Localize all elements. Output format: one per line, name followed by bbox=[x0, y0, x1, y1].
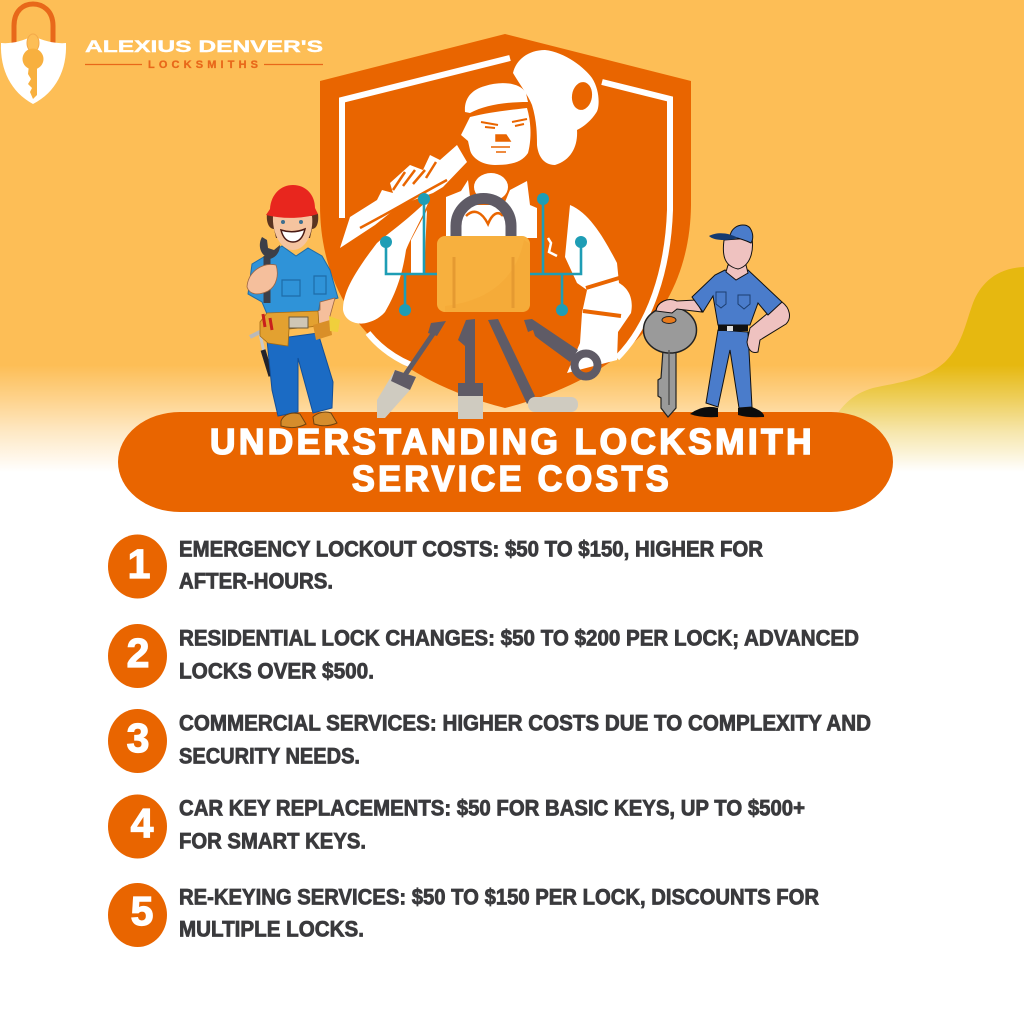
worker right: shoes bbox=[690, 407, 764, 417]
shield white outline bbox=[342, 58, 670, 365]
logo tagline: LOCKSMITHS bbox=[148, 59, 258, 71]
padlock bbox=[437, 198, 530, 312]
worker right: head and cap bbox=[709, 225, 753, 280]
figure: upper left arm bbox=[343, 198, 430, 324]
figure: right arm bbox=[565, 205, 632, 373]
figure: shoulder key shaft and hand bbox=[340, 145, 467, 248]
worker right: trousers bbox=[706, 330, 752, 408]
worker right: belt bbox=[718, 325, 748, 331]
logo icon: padlock shield bbox=[1, 4, 66, 104]
item 1 text: EMERGENCY LOCKOUT COSTS: $50 TO $150, HIGHER FOR bbox=[179, 536, 763, 562]
worker left: hammer bbox=[250, 331, 271, 376]
list item 5 bbox=[108, 883, 819, 947]
badge 1: 1 bbox=[128, 541, 150, 587]
tool: flat driver bbox=[458, 319, 483, 419]
worker left: head bbox=[266, 185, 318, 250]
item 3 text: SECURITY NEEDS. bbox=[179, 744, 360, 768]
shield base bbox=[320, 34, 691, 408]
giant key head bbox=[513, 50, 599, 165]
circuit right bbox=[530, 193, 587, 316]
list item 2 bbox=[108, 624, 859, 688]
badge 5 bbox=[108, 883, 167, 947]
worker with key bbox=[644, 225, 789, 417]
worker left: hard hat bbox=[266, 185, 318, 218]
item 4 text: CAR KEY REPLACEMENTS: $50 FOR BASIC KEYS, UP TO $500+ bbox=[179, 796, 805, 820]
worker left: shirt bbox=[248, 246, 338, 314]
worker left: other arm bbox=[313, 298, 335, 328]
worker with wrench bbox=[247, 185, 340, 428]
logo bbox=[1, 4, 323, 104]
worker left: boots bbox=[281, 412, 337, 428]
badge 1 bbox=[108, 534, 167, 598]
worker right: arm on key bbox=[656, 300, 702, 313]
badge 3: 3 bbox=[127, 715, 149, 761]
badge 3 bbox=[108, 709, 167, 773]
item 1 text: AFTER-HOURS. bbox=[179, 568, 333, 594]
item 2 text: LOCKS OVER $500. bbox=[179, 658, 374, 684]
item 5 text: RE-KEYING SERVICES: $50 TO $150 PER LOCK, DISCOUNTS FOR bbox=[179, 884, 819, 910]
list item 3 bbox=[108, 709, 871, 773]
item 4 text bbox=[179, 796, 805, 854]
item 5 text bbox=[179, 884, 819, 942]
badge 5: 5 bbox=[131, 888, 153, 934]
badge 2: 2 bbox=[127, 630, 149, 676]
padlock body bbox=[437, 236, 530, 312]
worker right: hip arm bbox=[747, 302, 789, 353]
background: amber header bbox=[0, 0, 1024, 480]
item 5 text: MULTIPLE LOCKS. bbox=[179, 916, 364, 942]
item 1 text bbox=[179, 536, 763, 594]
background: yellow wave bbox=[830, 267, 1024, 480]
shield illustration bbox=[320, 34, 691, 419]
item 2 text bbox=[179, 626, 859, 684]
figure: cap bbox=[465, 83, 528, 113]
tool: wrench key bbox=[524, 319, 598, 376]
badge 2 bbox=[108, 624, 167, 688]
worker right: giant key bbox=[644, 307, 696, 417]
logo wordmark: ALEXIUS DENVER'S bbox=[85, 37, 323, 56]
tool: pick bbox=[488, 319, 578, 412]
item 3 text: COMMERCIAL SERVICES: HIGHER COSTS DUE TO COMPLEXITY AND bbox=[179, 710, 871, 736]
worker left: wrench and hand bbox=[247, 237, 280, 303]
item 4 text: FOR SMART KEYS. bbox=[179, 828, 366, 854]
locksmith figure bbox=[340, 83, 632, 373]
tool: screwdriver bbox=[377, 321, 446, 418]
figure: bandana and shirt collar bbox=[446, 173, 557, 256]
figure: face bbox=[461, 108, 530, 165]
list item 1 bbox=[108, 534, 763, 598]
worker right: shirt bbox=[692, 270, 782, 325]
item 2 text: RESIDENTIAL LOCK CHANGES: $50 TO $200 PER LOCK; ADVANCED bbox=[179, 626, 859, 650]
padlock shackle bbox=[456, 198, 511, 238]
badge 4 bbox=[108, 794, 167, 858]
title line two: SERVICE COSTS bbox=[352, 458, 672, 499]
worker left: jeans bbox=[267, 333, 333, 416]
circuit left bbox=[380, 193, 437, 316]
worker left: tool belt bbox=[260, 311, 340, 346]
list item 4 bbox=[108, 794, 805, 858]
title banner bbox=[118, 412, 893, 512]
title line one: UNDERSTANDING LOCKSMITH bbox=[210, 421, 815, 462]
item 3 text bbox=[179, 710, 871, 768]
badge 4: 4 bbox=[131, 800, 154, 846]
background: white fade bbox=[0, 360, 1024, 480]
banner pill bbox=[118, 412, 893, 512]
